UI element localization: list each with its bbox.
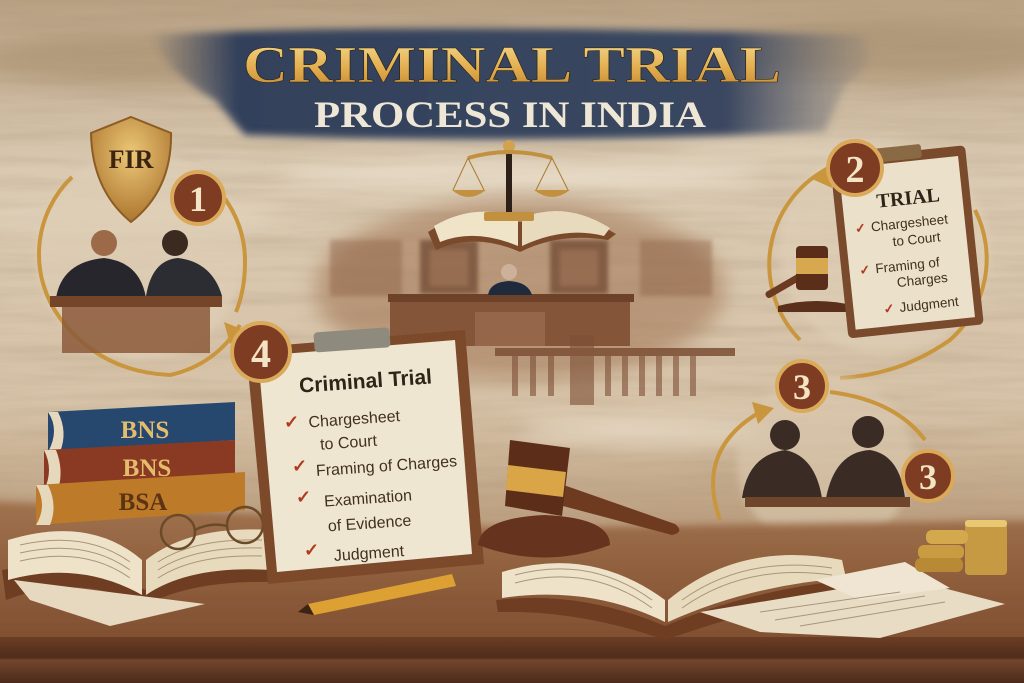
- panel: step 3: [713, 361, 953, 550]
- orange book: [36, 472, 245, 525]
- clipboard: Chargesheet: [870, 211, 949, 234]
- icon: gavel: [764, 246, 856, 312]
- badge 2: 2: [846, 149, 864, 191]
- clipboard: criminal trial checklist: Criminal Trial: [298, 365, 433, 398]
- badge 3 top: [777, 361, 827, 411]
- glasses: [161, 507, 263, 549]
- figures: [56, 230, 222, 298]
- red book: [44, 440, 235, 490]
- checklist items: Judgment: [333, 543, 405, 565]
- badge 3 bottom: [903, 451, 953, 501]
- icon: scales of justice on open book: [428, 140, 616, 252]
- checklist items: of Evidence: [327, 513, 412, 535]
- loose paper left: [14, 580, 205, 626]
- badge 1: 1: [189, 179, 207, 219]
- blue book: BNS: [121, 417, 169, 444]
- badge 1: [172, 172, 224, 224]
- railing: [495, 335, 735, 405]
- title line 1: CRIMINAL TRIAL: [243, 37, 781, 94]
- bench: [390, 300, 630, 346]
- clipboard: Framing of: [875, 255, 941, 276]
- title line 2: PROCESS IN INDIA: [314, 95, 706, 136]
- checklist items: Examination: [324, 487, 413, 511]
- book stack: [36, 402, 245, 525]
- clipboard: to Court: [892, 229, 941, 249]
- badge 3 bottom: 3: [919, 457, 937, 497]
- checklist items: Chargesheet: [308, 408, 401, 431]
- papers: [700, 562, 1005, 638]
- clipboard: criminal trial checklist: ✓: [292, 456, 307, 476]
- clipboard: criminal trial checklist: ✓: [284, 412, 299, 432]
- wooden desk: [0, 500, 1024, 683]
- figures: [742, 416, 905, 498]
- clipboard: Charges: [896, 270, 949, 290]
- icon: FIR shield: [91, 117, 171, 222]
- judge: [488, 264, 532, 295]
- icon: coins: [915, 520, 1007, 575]
- badge 3 top: 3: [793, 367, 811, 407]
- courtroom illustration: [315, 200, 735, 405]
- open book right: [496, 555, 850, 640]
- panel: step 2 trial: [764, 139, 990, 378]
- icon: pencil: [298, 574, 456, 615]
- clipboard: Judgment: [899, 294, 960, 315]
- open book left: [2, 529, 275, 606]
- lectern: [50, 296, 222, 353]
- blue book: [48, 402, 235, 452]
- clipboard: ✓: [859, 262, 871, 278]
- checklist items: to Court: [320, 433, 378, 454]
- badge 4: [232, 323, 290, 381]
- icon: large gavel: [478, 440, 679, 558]
- badge 4: 4: [251, 331, 271, 376]
- orange book: BSA: [119, 489, 167, 516]
- clipboard: ✓: [883, 301, 895, 317]
- clipboard: TRIAL: [876, 184, 941, 213]
- badge 2: [828, 141, 882, 195]
- clipboard: criminal trial checklist: ✓: [304, 540, 319, 560]
- panel: step 1 FIR: [36, 117, 245, 375]
- icon: FIR shield: FIR: [109, 145, 154, 174]
- clipboard: criminal trial checklist: ✓: [296, 487, 311, 507]
- checklist items: Framing of Charges: [315, 453, 458, 480]
- clipboard: criminal trial checklist: [246, 327, 484, 584]
- red book: BNS: [123, 455, 171, 482]
- clipboard: ✓: [854, 220, 867, 236]
- title banner: [150, 28, 870, 139]
- clipboard: [829, 139, 984, 338]
